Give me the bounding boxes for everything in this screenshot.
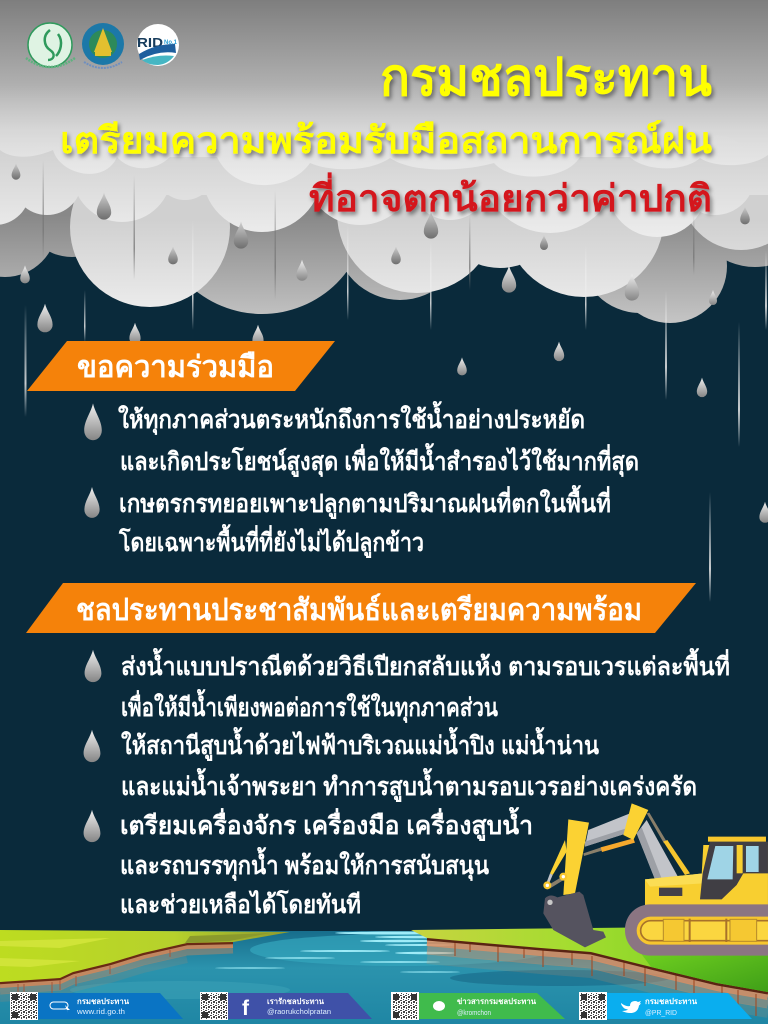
cab and body bbox=[645, 837, 768, 905]
crawler track bbox=[625, 904, 768, 956]
section 2 text: เตรียมเครื่องจักร เครื่องมือ เครื่องสูบน้ำ bbox=[120, 806, 533, 842]
section 2 text: และแม่น้ำเจ้าพระยา ทำการสูบน้ำตามรอบเวรอย่างเคร่งครัด bbox=[121, 767, 697, 803]
cloud top layer bbox=[0, 85, 768, 185]
title bbox=[60, 49, 712, 219]
excavator bbox=[543, 803, 768, 956]
background: dark navy bbox=[0, 250, 768, 1024]
background: sky bbox=[0, 0, 768, 260]
clouds bbox=[0, 85, 768, 323]
footer: website: กรมชลประทาน bbox=[77, 997, 130, 1006]
section 2 bullet icons bbox=[84, 650, 101, 842]
footer: line bbox=[392, 992, 565, 1020]
left bank grass bbox=[0, 930, 290, 982]
section 1 heading bbox=[27, 341, 335, 391]
footer: facebook: เรารักชลประทาน bbox=[267, 997, 325, 1006]
river bbox=[0, 931, 768, 1024]
section 2 heading bbox=[26, 583, 696, 633]
river and land scene bbox=[0, 926, 768, 1024]
section 2 text: ส่งน้ำแบบปราณีตด้วยวิธีเปียกสลับแห้ง ตามรอบเวรแต่ละพื้นที่ bbox=[121, 647, 730, 681]
logo: royal irrigation department bbox=[82, 23, 124, 68]
cloud front layer bbox=[70, 195, 768, 307]
section 2 text: เพื่อให้มีน้ำเพียงพอต่อการใช้ในทุกภาคส่วน bbox=[121, 688, 498, 724]
footer: facebook: f bbox=[242, 997, 250, 1020]
section 1 text: และเกิดประโยชน์สูงสุด เพื่อให้มีน้ำสำรองไว้ใช้มากที่สุด bbox=[120, 442, 639, 478]
boom arms bbox=[543, 803, 690, 895]
cloud mid layer bbox=[0, 160, 768, 237]
title line 3: ที่อาจตกน้อยกว่าค่าปกติ bbox=[309, 172, 712, 219]
section 2 text: ให้สถานีสูบน้ำด้วยไฟฟ้าบริเวณแม่น้ำปิง แม่น้ำน่าน bbox=[121, 726, 599, 762]
logo: RID No.1: RID bbox=[137, 35, 163, 50]
left bank soil bbox=[0, 943, 233, 998]
footer: website bbox=[10, 992, 183, 1020]
footer: twitter: @PR_RID bbox=[645, 1010, 677, 1017]
section 1 heading: ขอความร่วมมือ bbox=[77, 351, 274, 384]
logo: RID No.1 bbox=[137, 24, 179, 66]
footer: website: www.rid.go.th bbox=[76, 1009, 125, 1016]
cloud back layer bbox=[0, 201, 768, 323]
footer: twitter: กรมชลประทาน bbox=[645, 997, 698, 1006]
bucket bbox=[543, 892, 606, 947]
section 1 text: โดยเฉพาะพื้นที่ที่ยังไม่ได้ปลูกข้าว bbox=[118, 523, 424, 559]
logos bbox=[26, 23, 179, 68]
right bank soil bbox=[427, 939, 768, 1016]
footer: line: ข่าวสารกรมชลประทาน bbox=[457, 997, 537, 1006]
section 2 text bbox=[120, 647, 730, 919]
logo: RID No.1: No.1 bbox=[164, 40, 178, 46]
footer: line: @kromchon bbox=[457, 1010, 491, 1017]
rain drops bbox=[12, 163, 768, 523]
footer links bbox=[10, 992, 752, 1020]
section 1 text: เกษตรกรทยอยเพาะปลูกตามปริมาณฝนที่ตกในพื้นที่ bbox=[119, 484, 611, 520]
rain streaks bbox=[24, 160, 767, 602]
section 2 heading: ชลประทานประชาสัมพันธ์และเตรียมความพร้อม bbox=[76, 593, 642, 627]
section 2 text: และช่วยเหลือได้โดยทันที bbox=[120, 889, 361, 919]
footer: facebook bbox=[200, 992, 372, 1020]
section 1 text bbox=[118, 400, 639, 559]
right bank grass bbox=[411, 926, 768, 992]
title line 2: เตรียมความพร้อมรับมือสถานการณ์ฝน bbox=[60, 120, 712, 161]
footer: twitter bbox=[580, 992, 752, 1020]
section 2 text: และรถบรรทุกน้ำ พร้อมให้การสนับสนุน bbox=[120, 846, 489, 882]
section 1 text: ให้ทุกภาคส่วนตระหนักถึงการใช้น้ำอย่างประหยัด bbox=[118, 400, 585, 436]
title line 1: กรมชลประทาน bbox=[380, 49, 712, 107]
logo: ministry emblem bbox=[26, 23, 75, 67]
footer: facebook: @raorukcholpratan bbox=[267, 1009, 331, 1016]
section 1 bullet icons bbox=[84, 403, 102, 518]
